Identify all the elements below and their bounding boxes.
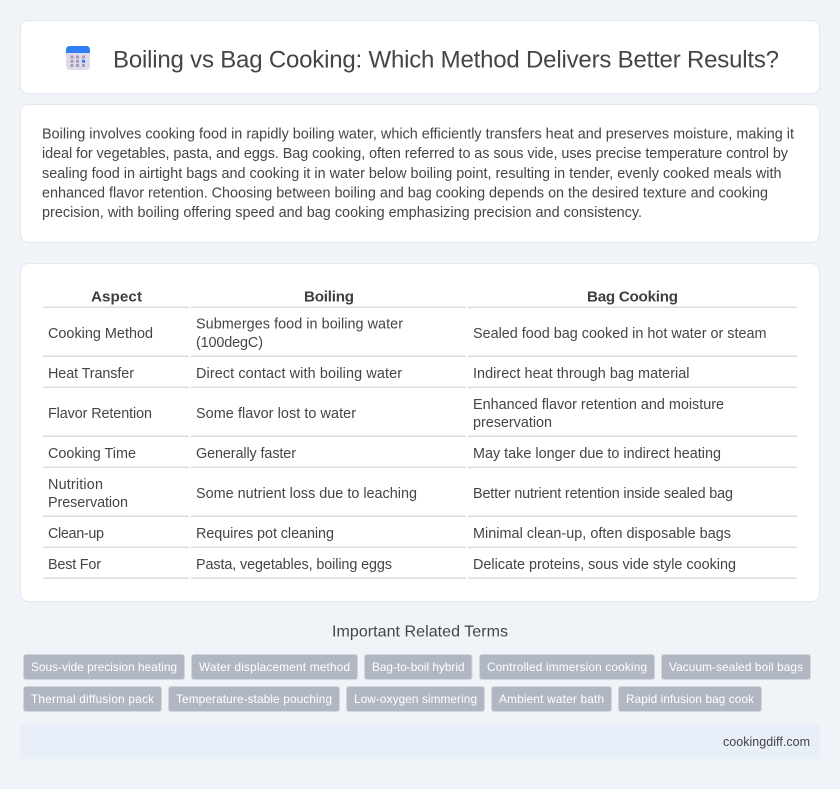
- row: cooking method: Cooking Method: [48, 326, 153, 342]
- row: cooking time: Cooking Time: [48, 446, 136, 462]
- row: cooking time: May take longer due to indirect heating: [473, 446, 721, 462]
- chip: vacuum-sealed: [662, 654, 810, 680]
- chip: bag-to-boil: [364, 654, 472, 680]
- row: clean-up: [48, 526, 731, 542]
- related terms chips: [24, 654, 810, 712]
- chip: water displacement: [192, 654, 358, 680]
- row: best for: [48, 557, 736, 573]
- chip: low-oxygen: [346, 686, 484, 712]
- intro paragraph: precision, with boiling offering speed and bag cooking emphasizing precision and consistency.: [42, 205, 642, 221]
- table header row: Bag Cooking: [587, 288, 678, 306]
- table header row: [91, 288, 678, 306]
- chip: sous-vide: Sous-vide precision heating: [31, 660, 177, 674]
- chip: rapid infusion: [618, 686, 762, 712]
- row: cooking method: [48, 316, 766, 351]
- table header row: Aspect: [91, 288, 142, 306]
- chip: temperature-stable: Temperature-stable pouching: [176, 692, 332, 706]
- chip: sous-vide: [24, 654, 184, 680]
- row: nutrition preservation: Better nutrient retention inside sealed bag: [473, 486, 733, 502]
- row: flavor retention: Enhanced flavor retention and moisture: [473, 397, 724, 413]
- chip: ambient water bath: [492, 686, 612, 712]
- row: cooking time: Generally faster: [196, 446, 296, 462]
- row: nutrition preservation: [48, 477, 733, 511]
- row: nutrition preservation: Some nutrient loss due to leaching: [196, 486, 417, 502]
- row: best for: Pasta, vegetables, boiling eggs: [196, 557, 392, 573]
- heading: related terms: Important Related Terms: [332, 624, 508, 640]
- row: flavor retention: [48, 397, 724, 431]
- intro paragraph: Boiling involves cooking food in rapidly boiling water, which efficiently transfers heat and preserves moisture, making it: [42, 126, 794, 142]
- chip: controlled immersion: [480, 654, 654, 680]
- intro paragraph: [42, 126, 794, 221]
- row: heat transfer: Indirect heat through bag material: [473, 366, 690, 382]
- chip: controlled immersion: Controlled immersion cooking: [487, 660, 647, 674]
- chip: water displacement: Water displacement method: [199, 660, 350, 674]
- row: nutrition preservation: Preservation: [48, 495, 128, 511]
- row: best for: Best For: [48, 557, 101, 573]
- chip: low-oxygen: Low-oxygen simmering: [354, 692, 477, 706]
- row: nutrition preservation: Nutrition: [48, 477, 103, 493]
- row: cooking method: Submerges food in boiling water: [196, 316, 403, 332]
- footer bar: [20, 725, 820, 759]
- row: clean-up: Requires pot cleaning: [196, 526, 334, 542]
- intro paragraph: enhanced flavor retention. Choosing between boiling and bag cooking depends on the desired texture and cooking: [42, 185, 768, 201]
- chip: thermal diffusion: [24, 686, 162, 712]
- footer source: cookingdiff.com: [723, 735, 810, 749]
- intro paragraph: sealing food in airtight bags and cooking it in water below boiling point, resulting in tender, evenly cooked meals with: [42, 166, 782, 182]
- chip: bag-to-boil: Bag-to-boil hybrid: [372, 660, 464, 674]
- chip: rapid infusion: Rapid infusion bag cook: [626, 692, 754, 706]
- row: cooking method: (100degC): [196, 335, 263, 351]
- chip: ambient water bath: Ambient water bath: [499, 692, 604, 706]
- header panel: [20, 20, 820, 94]
- row: best for: Delicate proteins, sous vide style cooking: [473, 557, 736, 573]
- title: Boiling vs Bag Cooking: Which Method Delivers Better Results?: [113, 46, 779, 74]
- chip: thermal diffusion: Thermal diffusion pack: [31, 692, 154, 706]
- row: flavor retention: Flavor Retention: [48, 406, 152, 422]
- icon: calendar: [66, 46, 90, 70]
- row: clean-up: Minimal clean-up, often disposable bags: [473, 526, 731, 542]
- chip: vacuum-sealed: Vacuum-sealed boil bags: [669, 660, 803, 674]
- row: clean-up: Clean-up: [48, 526, 104, 542]
- row: heat transfer: Direct contact with boiling water: [196, 366, 402, 382]
- panel: comparison table: [20, 264, 820, 602]
- panel: introduction: [20, 104, 820, 242]
- chip: temperature-stable: [168, 686, 340, 712]
- intro paragraph: ideal for vegetables, pasta, and eggs. Bag cooking, often referred to as sous vide, uses precise temperature control by: [42, 146, 789, 162]
- row: flavor retention: Some flavor lost to water: [196, 406, 356, 422]
- row: heat transfer: [48, 366, 690, 382]
- row: flavor retention: preservation: [473, 415, 552, 431]
- row: cooking method: Sealed food bag cooked in hot water or steam: [473, 326, 766, 342]
- row: cooking time: [48, 446, 721, 462]
- row: heat transfer: Heat Transfer: [48, 366, 134, 382]
- table header row: Boiling: [304, 288, 354, 306]
